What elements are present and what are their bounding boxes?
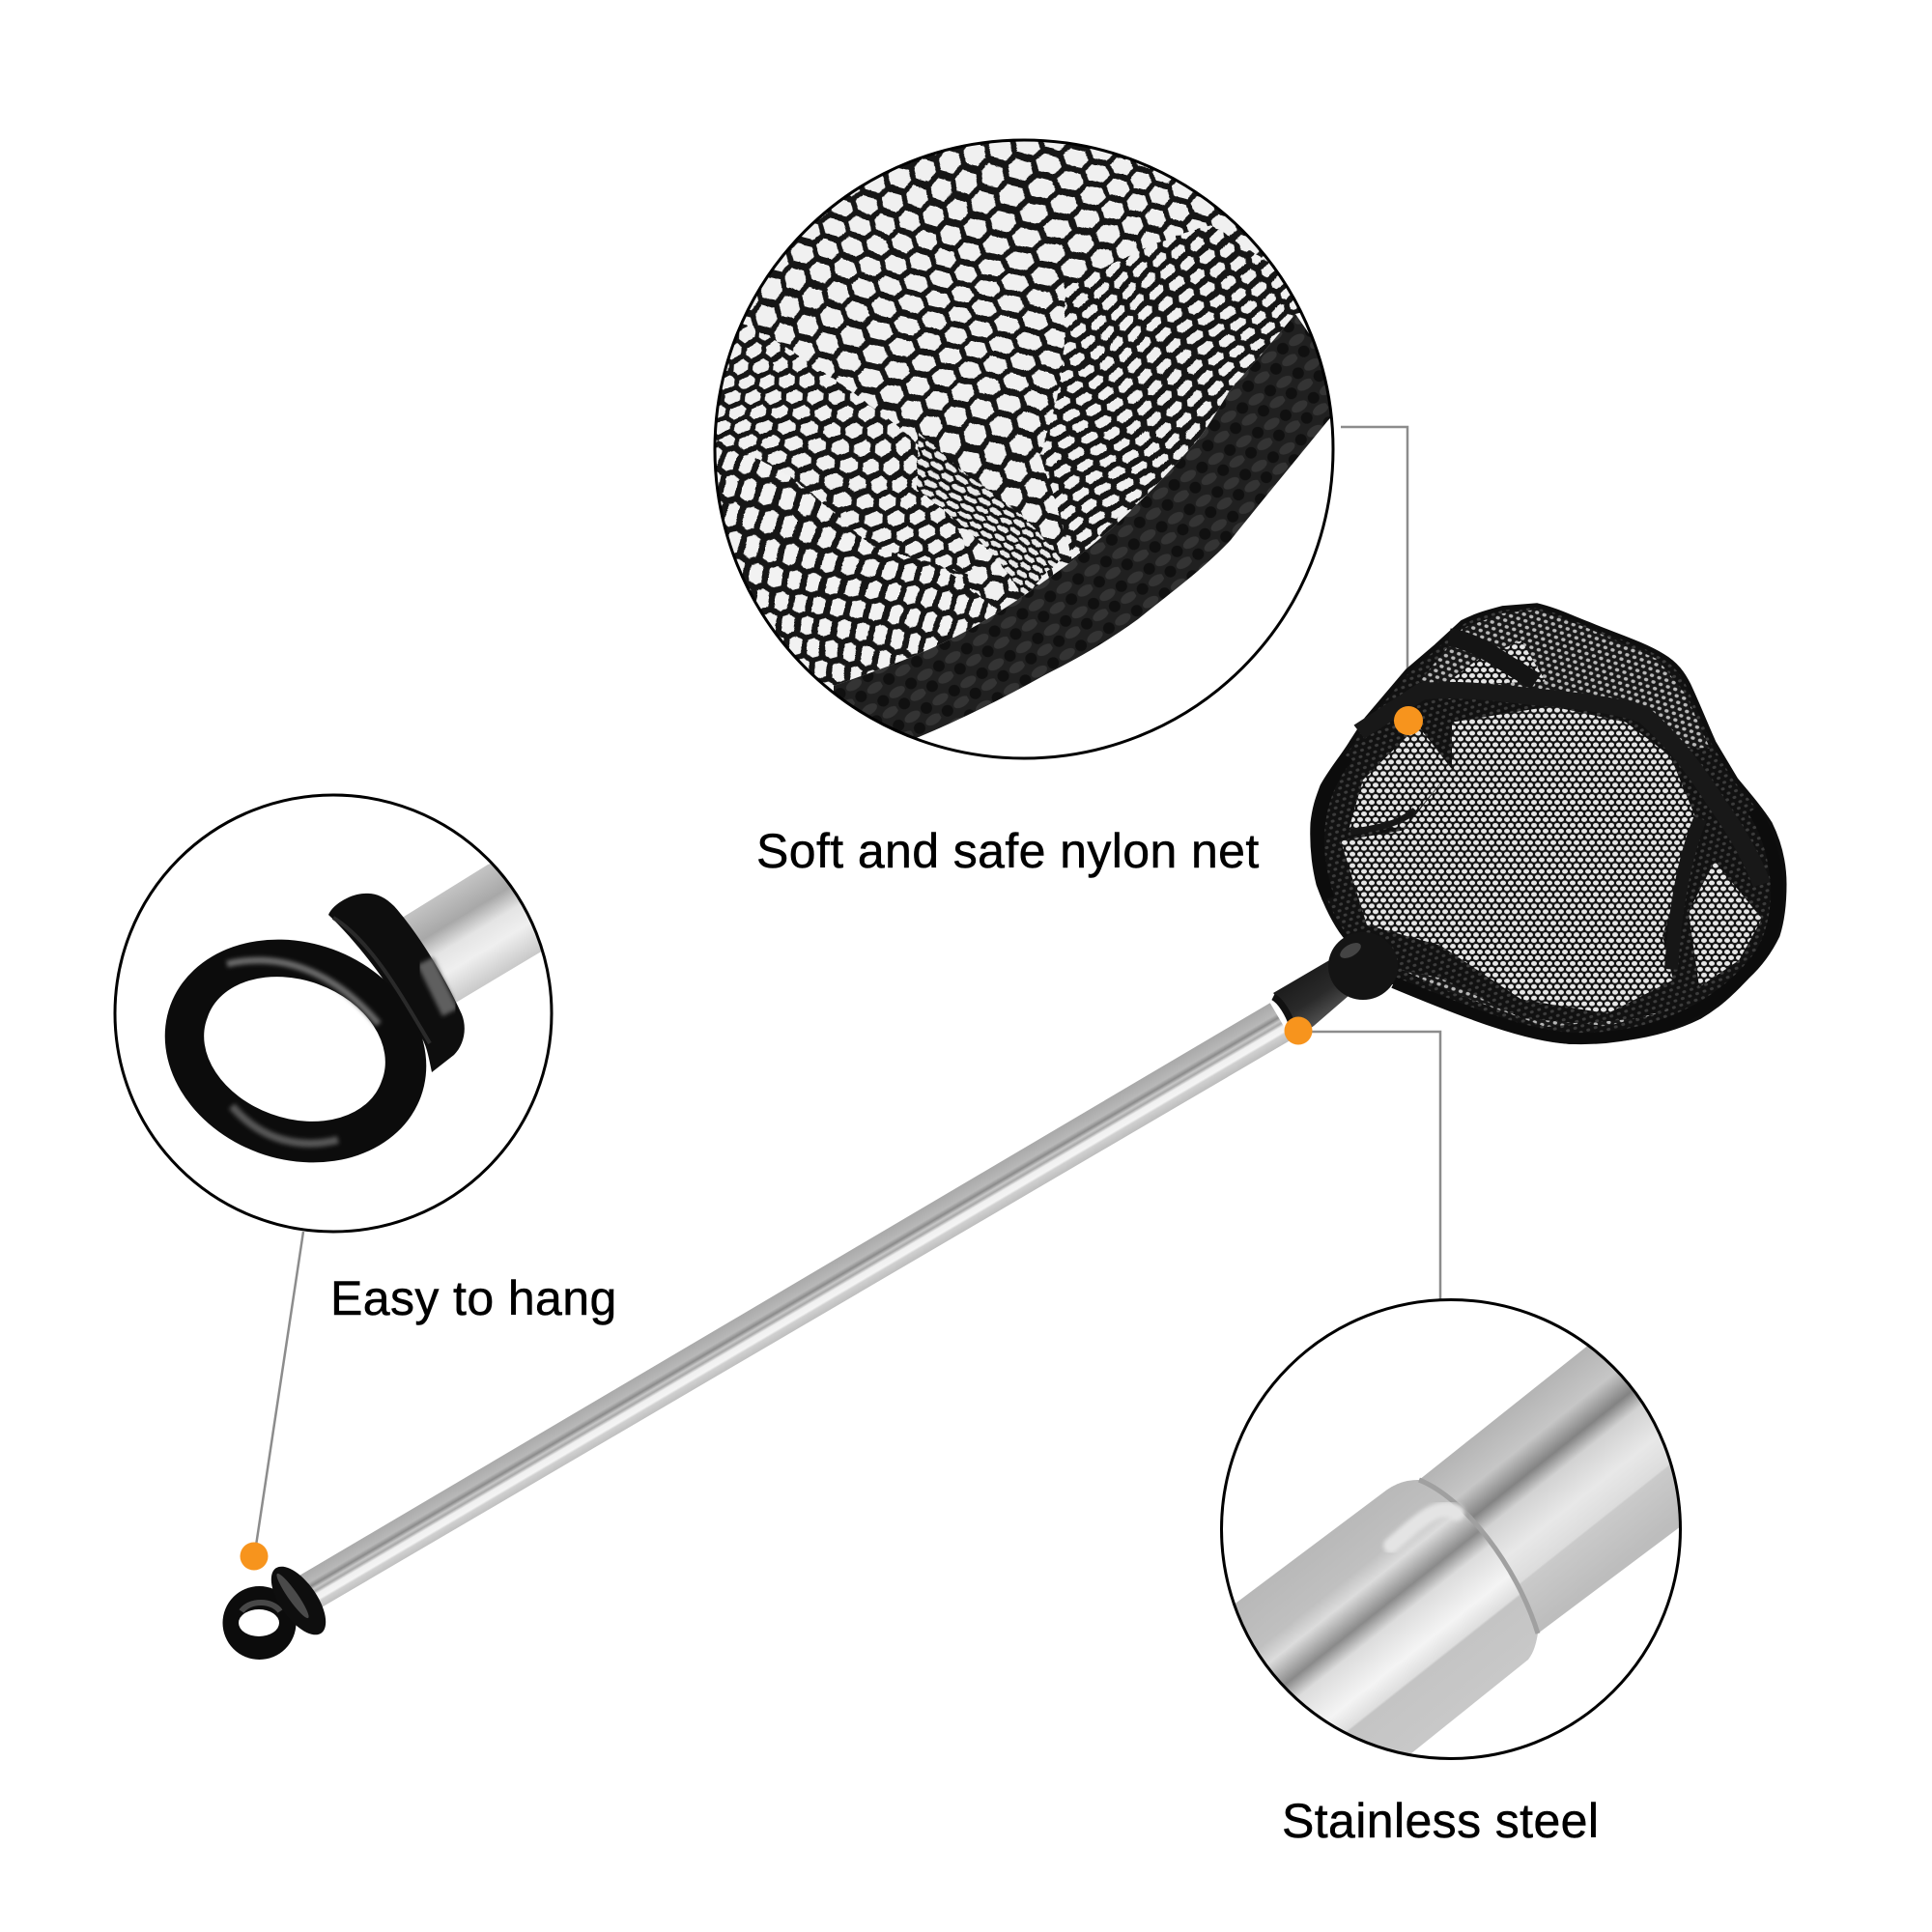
leader line: stainless steel: [1298, 1032, 1440, 1300]
dark fold, upper left: [1449, 638, 1536, 681]
callout circle: hanging ring: [115, 795, 599, 1232]
label: easy to hang: Easy to hang: [330, 1271, 617, 1325]
close-up ring and tube: [164, 864, 541, 1163]
net basket: [1313, 606, 1784, 1042]
marker dot: hanging ring: [240, 1542, 269, 1571]
left fold mesh: [1349, 725, 1452, 830]
net rim hoop: [1318, 756, 1776, 1038]
small eyelet: [222, 1558, 336, 1660]
product: fish net with handle: [222, 606, 1784, 1660]
circle outline: [115, 795, 552, 1232]
net bottom, light mesh: [1341, 706, 1695, 1013]
leader line: nylon net: [1341, 427, 1407, 710]
circle outline: [1221, 1300, 1681, 1758]
label: stainless steel: Stainless steel: [1282, 1794, 1599, 1848]
net binding band: [834, 314, 1352, 763]
telescopic stainless pole: [291, 1003, 1292, 1615]
marker dot: nylon net: [1394, 706, 1423, 735]
dark fold, lower right: [1671, 819, 1700, 969]
top fold mesh: [1444, 640, 1546, 685]
lower rim mesh: [1401, 969, 1671, 1027]
circle outline: [715, 140, 1333, 758]
callout circle: nylon net: [713, 139, 1335, 759]
back of net, upper mesh: [1420, 610, 1710, 748]
leader line: easy to hang: [256, 1232, 303, 1546]
label: soft and safe nylon net: Soft and safe nylon net: [756, 824, 1260, 878]
close-up net mesh: [717, 141, 1330, 738]
marker dot: stainless steel: [1285, 1016, 1312, 1045]
close-up steel tube: [1236, 1347, 1679, 1754]
callout circle: stainless steel tube: [1220, 1298, 1682, 1760]
black connector: [1273, 932, 1398, 1036]
net outline with dark mesh: [1313, 606, 1784, 1042]
dark fold, left: [1350, 810, 1415, 832]
dark folded net bands: [1359, 691, 1762, 884]
right lower fold mesh: [1689, 862, 1762, 987]
